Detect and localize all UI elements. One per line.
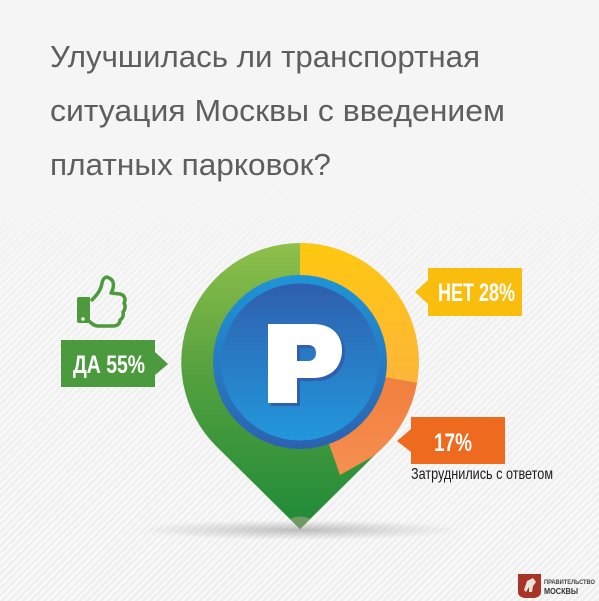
- letter P icon: [268, 324, 345, 406]
- callout: no 28%: [415, 268, 522, 316]
- icon: coat of arms: [518, 574, 541, 598]
- title: платных парковок?: [50, 147, 331, 182]
- title: Улучшилась ли транспортная: [50, 39, 480, 74]
- segment: yes 55% green: [181, 243, 419, 529]
- pin tip highlight: [290, 516, 310, 529]
- parking disc: [213, 275, 387, 449]
- segment: no 28% yellow: [300, 243, 419, 383]
- caption: undecided: Затруднились с ответом: [411, 466, 553, 483]
- segment: undecided 17% orange: [300, 362, 417, 475]
- logo: Moscow government: [518, 574, 595, 598]
- callout: yes 55%: ДА 55%: [73, 351, 145, 379]
- callout: undecided 17%: 17%: [434, 429, 472, 457]
- pin shadow: [135, 520, 465, 540]
- title: ситуация Москвы с введением: [50, 93, 505, 128]
- icon: thumbs up: [77, 277, 125, 326]
- title: [50, 39, 505, 182]
- callout: no 28%: НЕТ 28%: [438, 279, 515, 307]
- map pin donut chart: [181, 243, 419, 529]
- callout: yes 55%: [61, 340, 168, 387]
- callout: undecided 17%: [397, 417, 505, 464]
- logo: Moscow government: ПРАВИТЕЛЬСТВО: [544, 580, 595, 586]
- logo: Moscow government: МОСКВЫ: [544, 587, 578, 596]
